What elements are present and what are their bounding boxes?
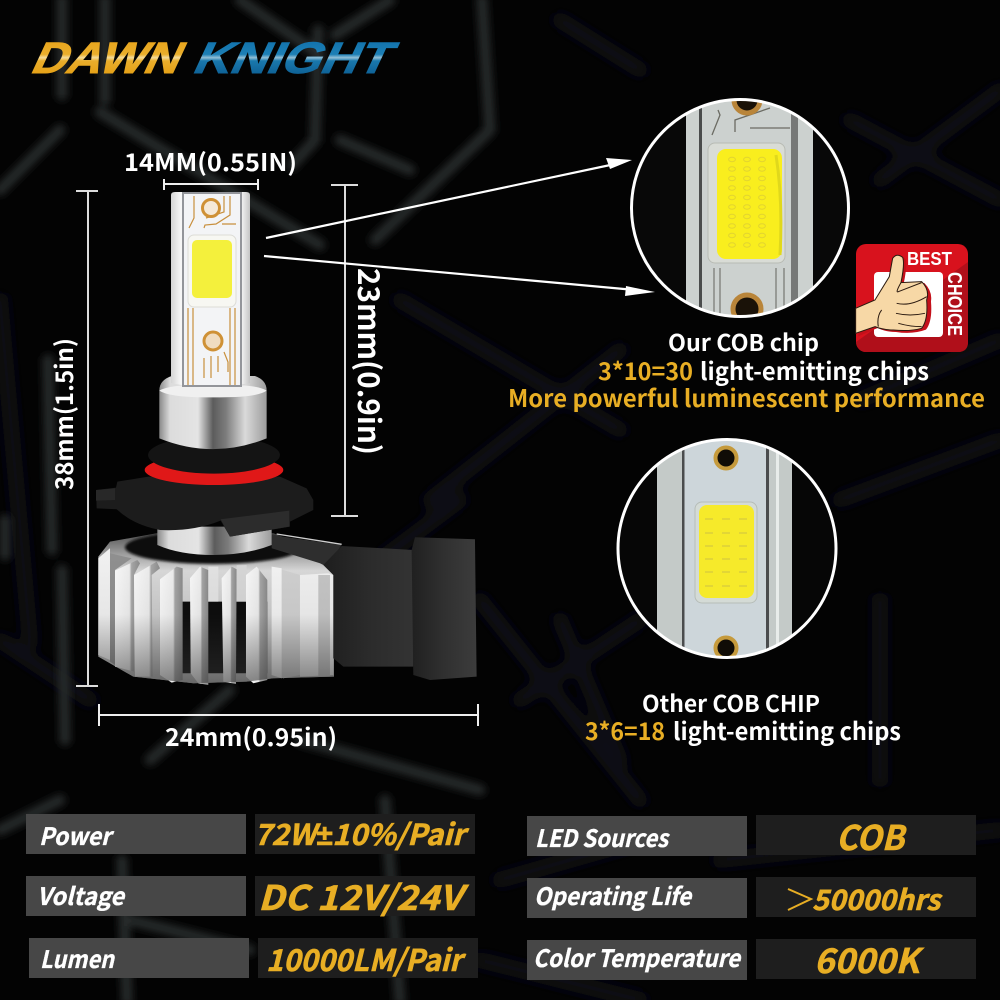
spec row: voltage: Voltage [37, 877, 126, 912]
dimension: 24mm width: 24mm(0.95in) [165, 718, 337, 753]
text block: other COB chip [585, 685, 901, 747]
text block: our COB chip: More powerful luminescent performance [508, 379, 985, 414]
badge: best choice [856, 244, 968, 352]
dimension: 14mm width: 14MM(0.55IN) [124, 143, 297, 178]
spec row: LED sources: LED Sources [535, 819, 670, 854]
LED stem with COB chip [171, 192, 250, 388]
spec row: LED sources: COB [836, 811, 908, 860]
dimension: 24mm width [99, 704, 478, 753]
spec row: lumen: Lumen [40, 940, 115, 975]
logo: DawnKnight: KNIGHT [187, 33, 405, 82]
heat sink [98, 531, 334, 685]
spec row: lumen [29, 936, 478, 980]
spec row: power [26, 812, 475, 854]
dimension: 23mm height [331, 185, 393, 516]
text block: our COB chip: light-emitting chips [700, 352, 929, 387]
spec row: color temperature [527, 934, 976, 983]
dimension: 38mm height: 38mm(1.5in) [45, 338, 80, 490]
logo: DawnKnight: DAWN [25, 33, 195, 82]
arrow to our chip [266, 158, 632, 238]
bulb product illustration [96, 192, 477, 685]
badge: best choice: BEST [907, 249, 952, 269]
dimension: 38mm height [45, 191, 98, 686]
spec row: operating life: 50000hrs [812, 879, 943, 919]
text block: our COB chip [508, 324, 985, 414]
badge: best choice: CHOICE [943, 272, 965, 336]
spec row: color temperature: Color Temperature [533, 939, 742, 974]
spec row: voltage: DC 12V/24V [258, 871, 470, 920]
dimension: 23mm height: 23mm(0.9in) [349, 268, 393, 455]
flange [96, 477, 313, 537]
arrow to chip detail [264, 256, 655, 296]
spec row: power: 72W±10%/Pair [254, 812, 469, 854]
spec row: operating life: Operating Life [534, 877, 693, 912]
icon: thumbs up hand [856, 255, 931, 336]
spec row: voltage [26, 871, 475, 920]
spec row: operating life [527, 877, 976, 919]
spec row: lumen: 10000LM/Pair [266, 936, 467, 980]
text block: other COB chip: 3*6=18 [585, 712, 665, 747]
text block: other COB chip: light-emitting chips [673, 712, 901, 747]
red o-ring [145, 455, 283, 485]
spec row: color temperature: 6000K [814, 934, 925, 983]
logo: DawnKnight [25, 33, 405, 82]
spec row: LED sources [527, 811, 976, 860]
connector plug [272, 534, 477, 680]
text block: our COB chip: Our COB chip [668, 324, 819, 358]
circle: our COB chip [631, 87, 849, 323]
lower silver collar [157, 527, 272, 555]
silver collar [159, 376, 267, 449]
black ring [148, 436, 280, 474]
text block: our COB chip: 3*10=30 [598, 352, 693, 387]
circle: other COB chip [617, 435, 837, 665]
spec row: power: Power [39, 817, 114, 852]
text block: other COB chip: Other COB CHIP [642, 685, 820, 719]
